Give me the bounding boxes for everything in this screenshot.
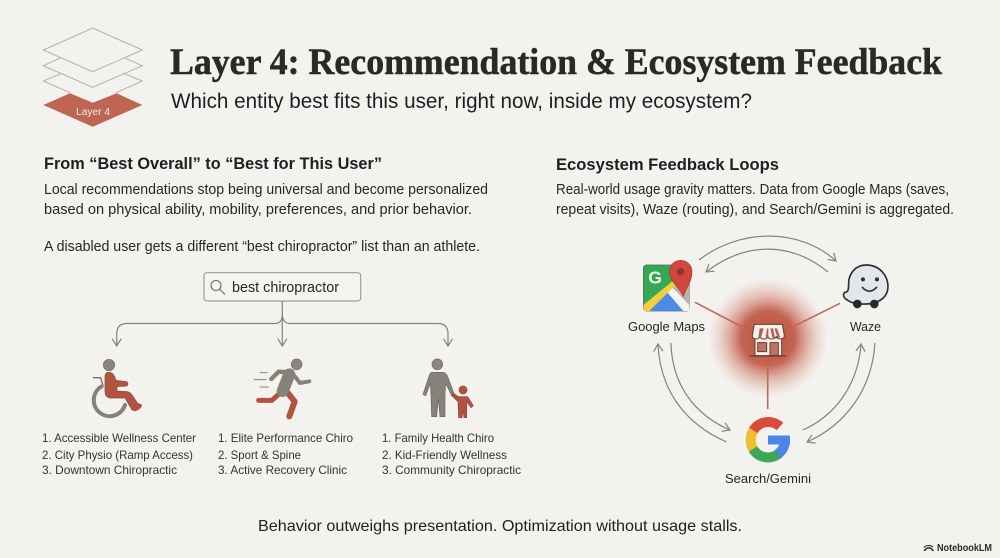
icon: google maps	[643, 260, 692, 311]
icon: layer stack	[43, 28, 142, 127]
list: family results: 3. Community Chiropractic	[382, 463, 521, 477]
right body text	[556, 182, 954, 218]
icon: google g	[751, 422, 790, 457]
right heading: Ecosystem Feedback Loops	[556, 155, 779, 174]
icon: google maps: G	[648, 267, 662, 287]
list: family results: 2. Kid-Friendly Wellness	[382, 448, 507, 462]
label: waze: Waze	[850, 319, 881, 334]
icon: wheelchair user	[93, 359, 142, 416]
label: google maps: Google Maps	[628, 319, 705, 334]
left heading: From “Best Overall” to “Best for This User”	[44, 154, 382, 173]
icon: magnifier	[211, 280, 225, 295]
list: accessible results	[42, 431, 196, 477]
list: athlete results: 1. Elite Performance Chiro	[218, 431, 353, 445]
icon: runner	[254, 359, 309, 416]
feedback loop arrows	[658, 236, 875, 442]
label: search/gemini: Search/Gemini	[725, 471, 811, 486]
right body text: repeat visits), Waze (routing), and Search/Gemini is aggregated.	[556, 202, 954, 218]
icon: adult and child	[423, 359, 473, 418]
icon: waze	[844, 265, 888, 308]
closing statement: Behavior outweighs presentation. Optimization without usage stalls.	[258, 518, 742, 535]
list: athlete results: 2. Sport & Spine	[218, 448, 301, 462]
notebooklm mark: NotebookLM	[937, 543, 992, 554]
list: family results	[382, 431, 521, 477]
list: athlete results	[218, 431, 353, 477]
right body text: Real-world usage gravity matters. Data from Google Maps (saves,	[556, 182, 949, 198]
layer 4 label: Layer 4	[76, 106, 110, 118]
search query: best chiropractor	[232, 280, 339, 296]
list: accessible results: 3. Downtown Chiropractic	[42, 463, 177, 477]
left body text: Local recommendations stop being universal and become personalized	[44, 182, 488, 198]
list: accessible results: 2. City Physio (Ramp Access)	[42, 448, 193, 462]
left body text	[44, 182, 488, 218]
subtitle: Which entity best fits this user, right now, inside my ecosystem?	[171, 89, 752, 113]
icon: storefront	[750, 324, 786, 356]
branching arrows	[117, 301, 448, 346]
left example sentence: A disabled user gets a different “best chiropractor” list than an athlete.	[44, 239, 480, 255]
search box	[204, 273, 361, 301]
connector lines to hub	[695, 302, 840, 409]
left body text: based on physical ability, mobility, preferences, and prior behavior.	[44, 202, 472, 218]
red glow	[708, 278, 828, 398]
title: Layer 4: Recommendation & Ecosystem Feedback	[170, 42, 942, 83]
list: athlete results: 3. Active Recovery Clinic	[218, 463, 347, 477]
list: family results: 1. Family Health Chiro	[382, 431, 494, 445]
list: accessible results: 1. Accessible Wellness Center	[42, 431, 196, 445]
